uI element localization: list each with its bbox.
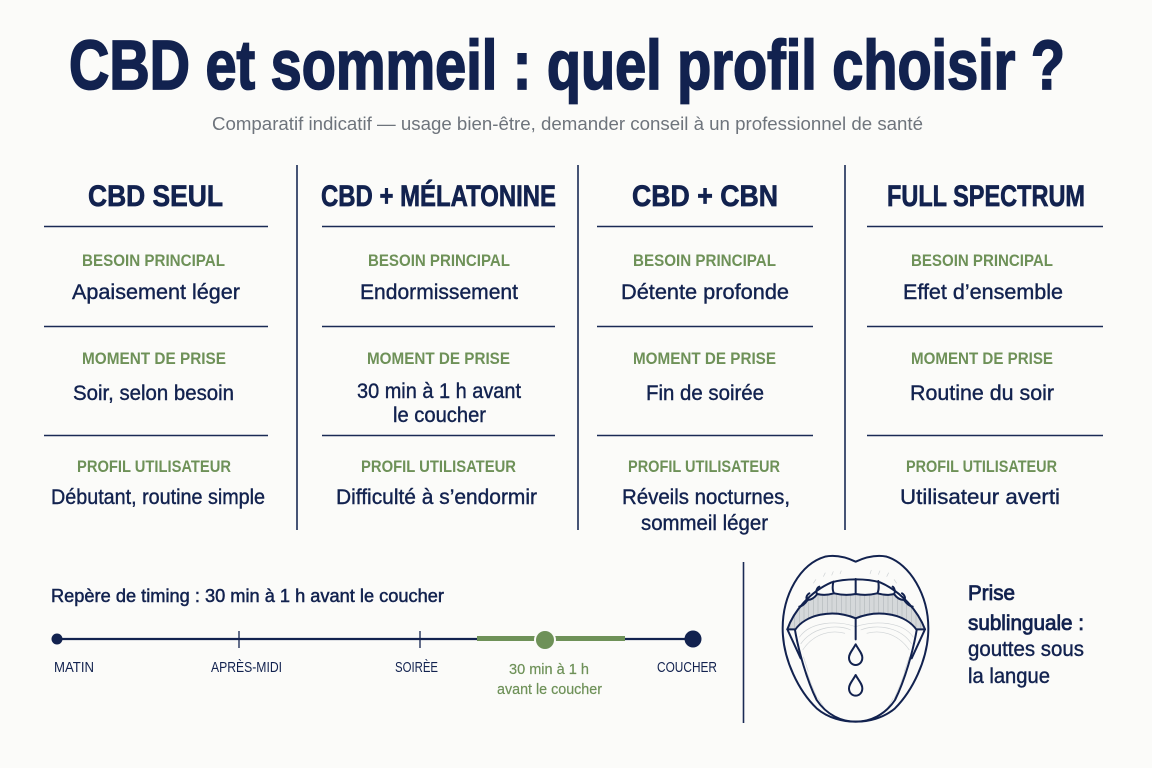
timing label: MOMENT DE PRISE (911, 350, 1053, 368)
timing value: Routine du soir (910, 381, 1054, 405)
sublingual caption: sublinguale : (968, 612, 1084, 635)
outer lips (783, 556, 928, 722)
profile value: sommeil léger (641, 511, 768, 535)
label: coucher: COUCHER (657, 660, 717, 676)
need value: Endormissement (360, 280, 518, 304)
icon: open mouth with drops under the tongue (783, 556, 930, 722)
timing label: MOMENT DE PRISE (82, 350, 226, 368)
timing label: MOMENT DE PRISE (367, 350, 510, 368)
column heading: CBD SEUL (88, 180, 223, 213)
need label: BESOIN PRINCIPAL (633, 252, 776, 270)
label: window before bed: avant le coucher (497, 681, 602, 698)
need label: BESOIN PRINCIPAL (368, 252, 510, 270)
need label: BESOIN PRINCIPAL (911, 252, 1053, 270)
column heading: FULL SPECTRUM (887, 180, 1085, 213)
first drop (849, 644, 862, 665)
label: soirée: SOIRÈE (395, 659, 438, 676)
sublingual caption: la langue (968, 665, 1050, 688)
sublingual caption: gouttes sous (968, 638, 1084, 661)
timeline axis (52, 629, 702, 651)
profile value: Utilisateur averti (900, 485, 1060, 509)
profile value (622, 485, 790, 535)
subtitle: Comparatif indicatif — usage bien-être, demander conseil à un professionnel de santé (212, 113, 923, 134)
label: window before bed: 30 min à 1 h (509, 661, 589, 678)
tongue median line (853, 618, 859, 639)
panel: full spectrum (867, 180, 1103, 509)
timing value: 30 min à 1 h avant (357, 379, 521, 403)
tongue (795, 614, 917, 722)
upper mouth edge (787, 579, 925, 629)
profile value: Réveils nocturnes, (622, 485, 790, 509)
panel: CBD + mélatonine (321, 179, 556, 509)
profile label: PROFIL UTILISATEUR (77, 458, 231, 476)
need value: Apaisement léger (72, 280, 240, 304)
profile label: PROFIL UTILISATEUR (906, 458, 1057, 476)
profile label: PROFIL UTILISATEUR (361, 458, 516, 476)
need label: BESOIN PRINCIPAL (82, 252, 225, 270)
panel: CBD seul (44, 180, 268, 509)
column heading: CBD + MÉLATONINE (321, 179, 556, 213)
profile label: PROFIL UTILISATEUR (628, 458, 780, 476)
timing value: Fin de soirée (646, 381, 764, 405)
gum band shading (788, 594, 924, 628)
sublingual caption (968, 582, 1084, 688)
label: après-midi: APRÈS-MIDI (211, 659, 282, 676)
timing value: le coucher (393, 403, 486, 427)
timing value: Soir, selon besoin (73, 381, 234, 405)
need value: Détente profonde (621, 280, 789, 304)
second drop (849, 675, 862, 696)
teeth (799, 579, 913, 607)
timeline heading: Repère de timing : 30 min à 1 h avant le coucher (51, 585, 444, 606)
panel: CBD + CBN (597, 180, 813, 535)
column heading: CBD + CBN (632, 180, 778, 213)
mouth corners (787, 629, 925, 658)
panel: timing timeline (51, 585, 717, 698)
label: matin: MATIN (54, 660, 94, 676)
need value: Effet d’ensemble (903, 280, 1063, 304)
profile value: Débutant, routine simple (51, 485, 265, 509)
sublingual caption: Prise (968, 582, 1015, 605)
label: window before bed (497, 661, 602, 698)
timing label: MOMENT DE PRISE (633, 350, 776, 368)
profile value: Difficulté à s’endormir (336, 485, 537, 509)
timing value (357, 379, 521, 427)
